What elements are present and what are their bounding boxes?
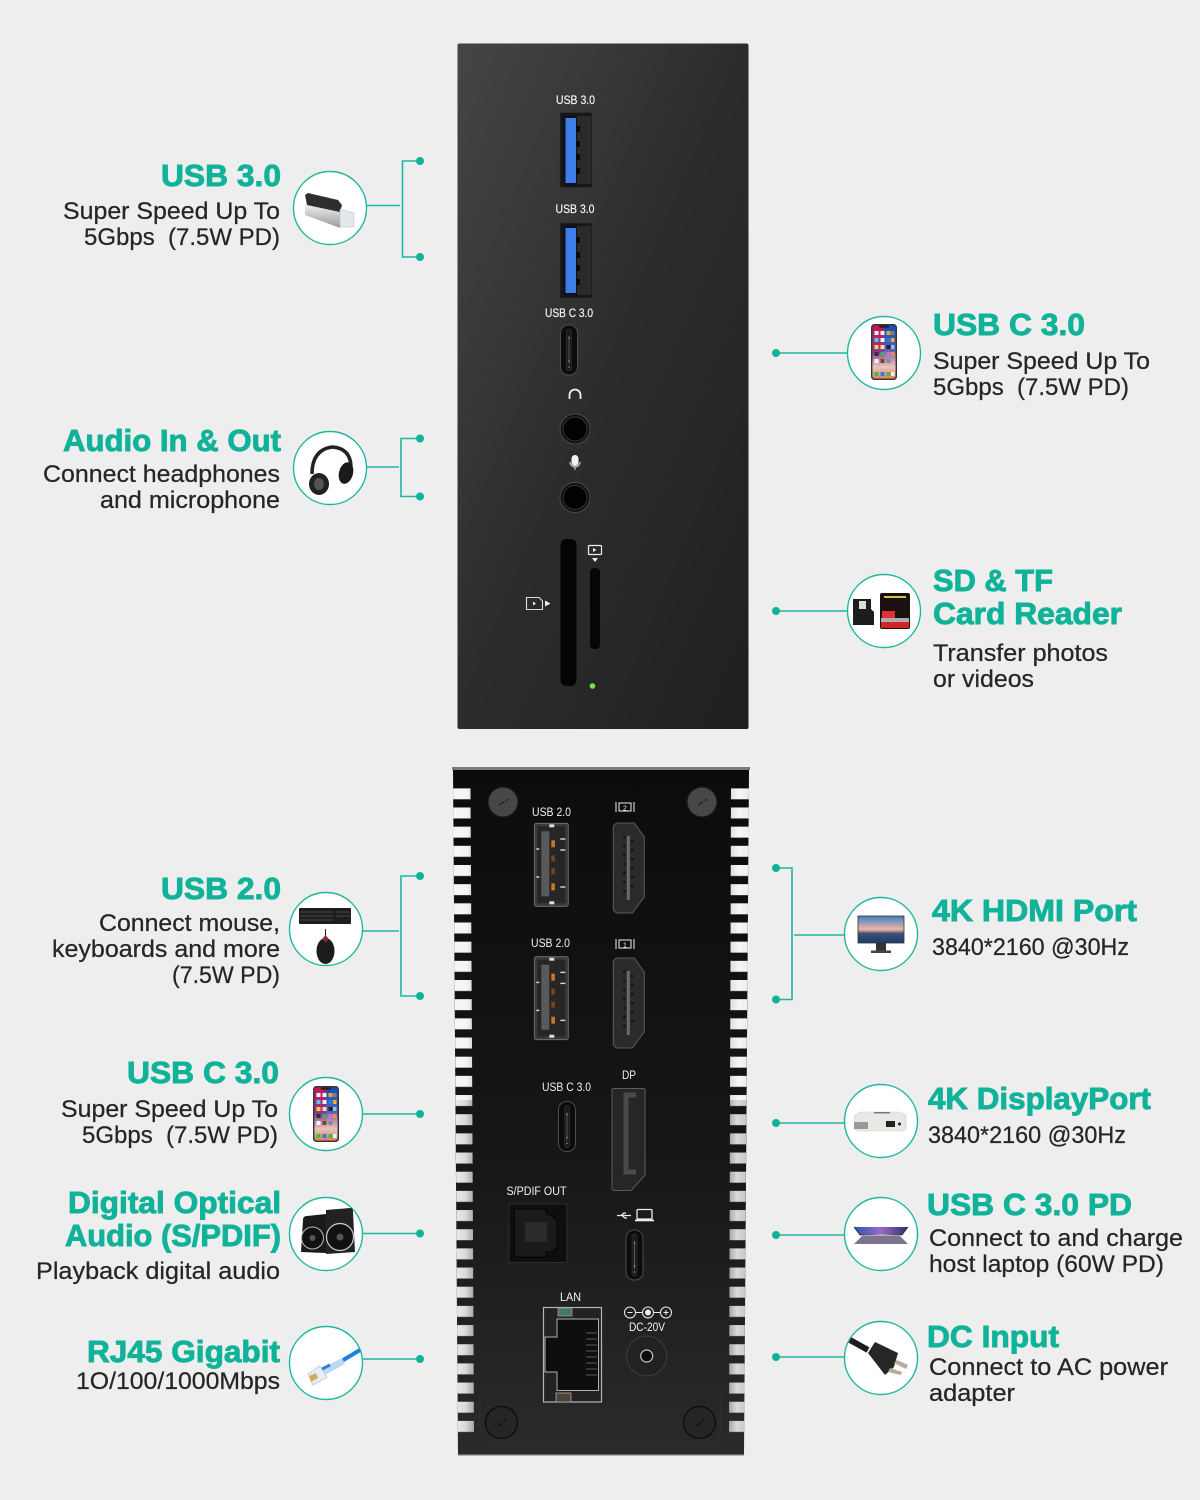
description	[929, 1225, 1183, 1278]
connector bracket	[772, 864, 844, 1004]
heading: USB 3.0	[161, 158, 281, 193]
heading: SD & TF	[933, 563, 1053, 598]
description	[52, 910, 280, 989]
description: host laptop (60W PD)	[929, 1251, 1164, 1278]
icon: display 1	[616, 939, 634, 950]
port: USB C front	[560, 325, 578, 375]
callout: USB 2.0	[52, 871, 424, 1000]
port: SD card slot	[560, 539, 576, 686]
description	[63, 198, 280, 251]
connector line	[772, 607, 847, 615]
heading	[933, 563, 1122, 631]
heading: RJ45 Gigabit	[87, 1334, 280, 1369]
port: HDMI 1	[613, 958, 644, 1048]
description: 3840*2160 @30Hz	[932, 934, 1129, 961]
icon: projector	[854, 1112, 906, 1131]
panel: dock back face	[452, 767, 750, 1455]
icon: display 2	[616, 802, 634, 812]
callout: USB C 3.0 PD	[772, 1187, 1183, 1278]
heading: Audio In & Out	[63, 423, 281, 458]
label: USB 3.0 upper: USB 3.0	[556, 95, 595, 107]
status LED	[590, 683, 595, 689]
description: adapter	[929, 1380, 1015, 1407]
heading: USB C 3.0 PD	[927, 1187, 1132, 1222]
description	[933, 640, 1108, 693]
heading: Audio (S/PDIF)	[65, 1218, 281, 1253]
screw: top right	[686, 786, 718, 818]
description: (7.5W PD)	[172, 962, 280, 989]
port: TF card slot	[590, 568, 600, 649]
callout: Audio In and Out	[43, 423, 424, 514]
screw: bottom right	[684, 1406, 716, 1438]
port: DisplayPort	[612, 1088, 645, 1190]
callout: 4K HDMI Port	[772, 864, 1137, 1004]
callout: USB C 3.0 front	[772, 307, 1150, 401]
connector bracket	[363, 872, 424, 1000]
connector line	[772, 1231, 844, 1239]
heading: DC Input	[927, 1319, 1059, 1354]
callout: DC Input	[772, 1319, 1168, 1407]
description: 1O/100/1000Mbps	[76, 1368, 280, 1395]
description: Super Speed Up To	[933, 348, 1150, 375]
connector line	[363, 1230, 424, 1238]
description: Transfer photos	[933, 640, 1108, 667]
icon: SD card	[526, 598, 550, 610]
callout: USB C 3.0 back	[61, 1055, 424, 1150]
callout: RJ45 Gigabit	[76, 1326, 424, 1400]
icon: keyboard and mouse	[299, 908, 351, 964]
icon: phone	[871, 324, 897, 380]
description	[61, 1096, 278, 1149]
port: headphone jack	[560, 414, 590, 444]
label: USB 2.0 lower: USB 2.0	[531, 938, 570, 950]
heading: 4K HDMI Port	[932, 893, 1137, 928]
port: DC jack	[627, 1336, 667, 1376]
label: USB C 3.0 back: USB C 3.0	[542, 1082, 591, 1094]
description	[929, 1354, 1168, 1407]
callout: 4K DisplayPort	[772, 1081, 1151, 1158]
connector line	[363, 1355, 424, 1363]
description: Playback digital audio	[36, 1258, 280, 1285]
description: Connect mouse,	[99, 910, 280, 937]
port: microphone jack	[560, 482, 590, 512]
connector line	[363, 1110, 424, 1118]
icon: memory cards	[853, 593, 910, 629]
icon: display 1: 1	[623, 942, 627, 950]
icon: DC polarity	[624, 1307, 672, 1318]
port: HDMI 2	[613, 823, 644, 913]
heading: USB C 3.0	[933, 307, 1085, 342]
label: DC-20V: DC-20V	[629, 1322, 665, 1334]
label: USB 2.0 upper: USB 2.0	[532, 807, 571, 819]
port: USB 3.0 upper	[560, 112, 592, 188]
description: Super Speed Up To	[61, 1096, 278, 1123]
icon: speakers	[301, 1208, 355, 1254]
callout: USB 3.0	[63, 157, 424, 261]
panel: dock front face	[458, 44, 748, 729]
icon: power plug	[850, 1340, 908, 1375]
connector line	[772, 1353, 844, 1361]
heading: Card Reader	[933, 596, 1122, 631]
connector line	[772, 349, 847, 357]
heading	[65, 1185, 281, 1253]
description: and microphone	[100, 487, 280, 514]
icon: USB flash drive	[305, 193, 354, 228]
port: USB 2.0 upper	[534, 823, 568, 906]
description	[933, 348, 1150, 401]
icon: monitor	[858, 916, 904, 953]
description: 5Gbps (7.5W PD)	[82, 1122, 278, 1149]
description: or videos	[933, 666, 1034, 693]
icon: headphones	[309, 447, 356, 495]
port: USB 2.0 lower	[534, 957, 568, 1040]
label: LAN: LAN	[560, 1292, 581, 1304]
icon: display 2: 2	[623, 806, 627, 812]
port: USB C PD	[626, 1230, 643, 1280]
icon: microphone	[570, 455, 580, 470]
callout: Digital Optical Audio	[36, 1185, 424, 1285]
description: Connect to AC power	[929, 1354, 1168, 1381]
description	[43, 461, 280, 514]
icon: phone	[313, 1086, 339, 1142]
port: USB C back	[558, 1102, 576, 1152]
connector bracket	[367, 434, 424, 500]
connector bracket	[367, 157, 424, 261]
heading: USB C 3.0	[127, 1055, 279, 1090]
port: USB 3.0 lower	[560, 223, 592, 298]
description: Super Speed Up To	[63, 198, 280, 225]
label: USB C 3.0 front: USB C 3.0	[545, 308, 593, 320]
label: DP: DP	[622, 1070, 636, 1082]
screw: top left	[487, 786, 519, 818]
port: RJ45 LAN	[544, 1308, 602, 1402]
port: S/PDIF optical	[509, 1204, 567, 1262]
icon: headphones	[570, 390, 580, 399]
icon: laptop	[854, 1227, 908, 1244]
heading: USB 2.0	[161, 871, 281, 906]
label: USB 3.0 lower: USB 3.0	[556, 204, 594, 216]
label: S/PDIF OUT: S/PDIF OUT	[506, 1186, 566, 1198]
icon: USB and laptop	[617, 1210, 654, 1221]
icon: TF card	[588, 546, 602, 562]
icon: ethernet plug	[308, 1350, 360, 1385]
screw: bottom left	[486, 1406, 518, 1438]
heading: Digital Optical	[68, 1185, 281, 1220]
connector line	[772, 1119, 844, 1127]
description: 3840*2160 @30Hz	[928, 1122, 1126, 1149]
heading: 4K DisplayPort	[928, 1081, 1151, 1116]
description: keyboards and more	[52, 936, 280, 963]
description: 5Gbps (7.5W PD)	[84, 224, 280, 251]
description: Connect headphones	[43, 461, 280, 488]
description: Connect to and charge	[929, 1225, 1183, 1252]
callout: SD and TF card reader	[772, 563, 1122, 693]
description: 5Gbps (7.5W PD)	[933, 374, 1129, 401]
